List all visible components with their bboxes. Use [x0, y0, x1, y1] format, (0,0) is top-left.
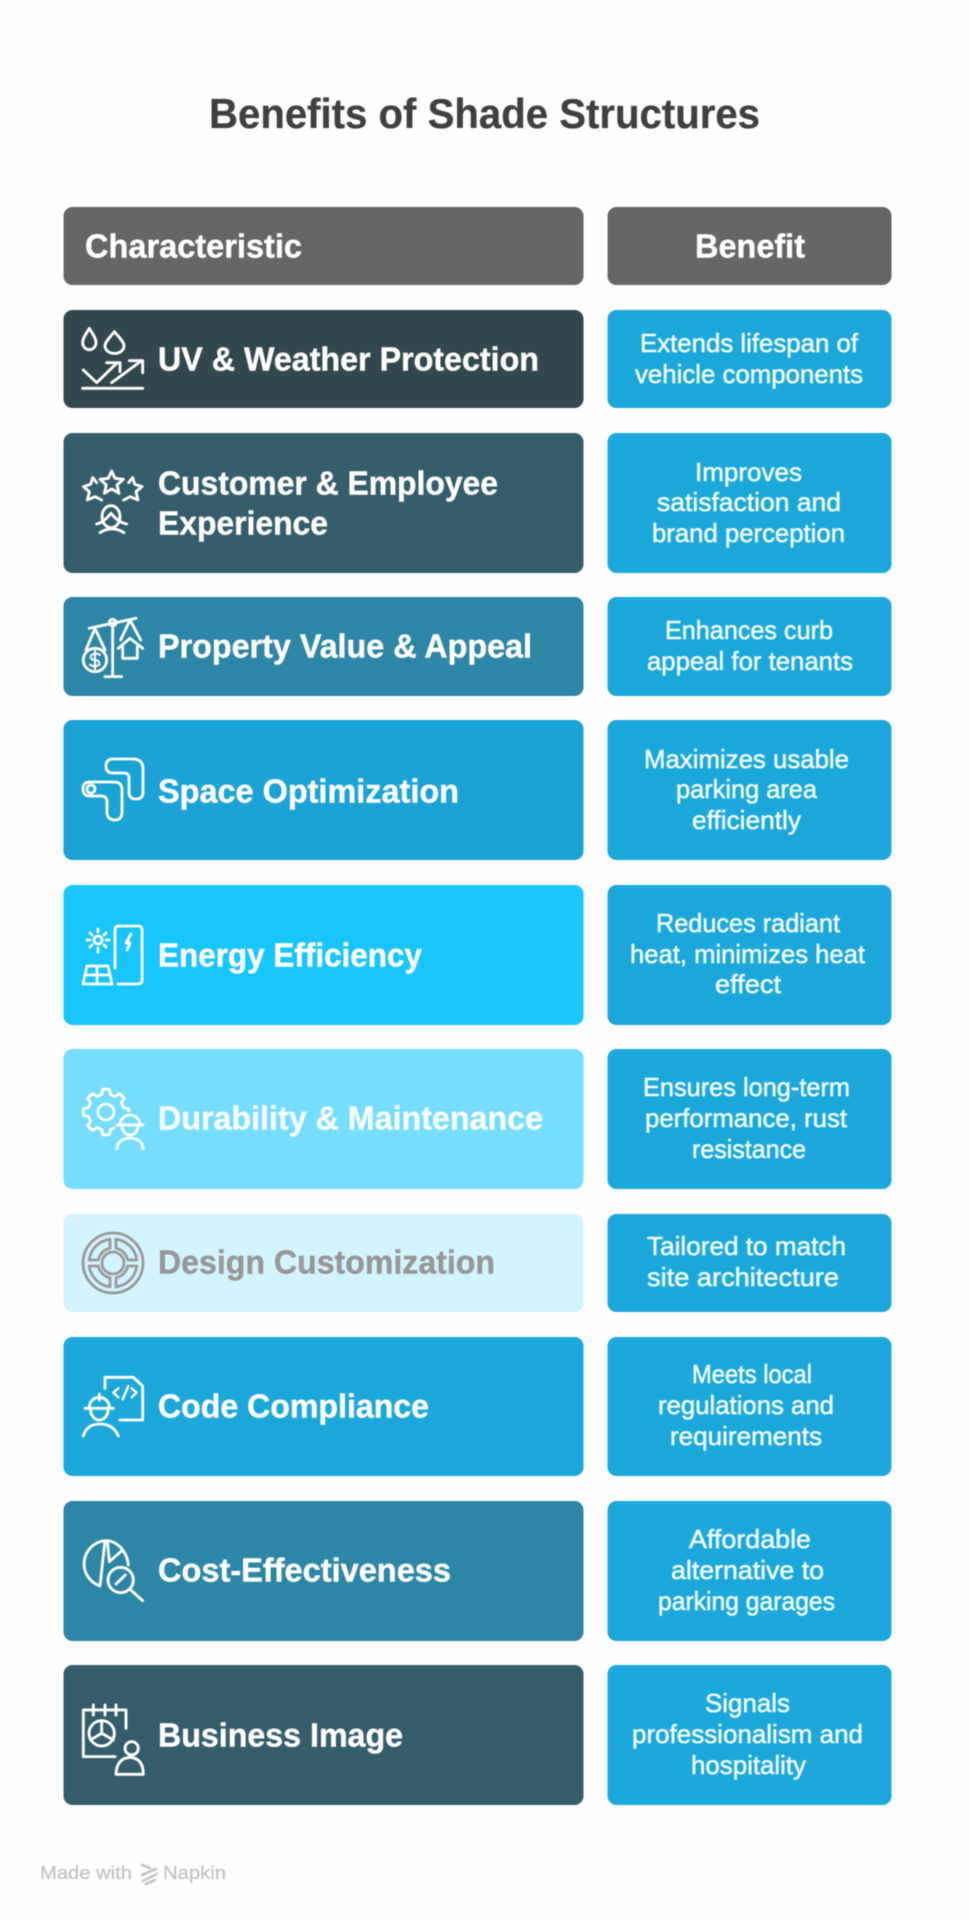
row 6 benefit	[608, 1049, 892, 1189]
row 1 benefit: Extends lifespan of	[640, 328, 859, 358]
label: Cost-Effectiveness	[158, 1552, 451, 1588]
row 8 benefit: Meets local	[692, 1359, 812, 1389]
row 4 benefit: Maximizes usable	[644, 744, 849, 774]
row 5 characteristic: energy efficiency	[64, 885, 584, 1025]
header: benefit: Benefit	[695, 228, 805, 264]
label: Durability & Maintenance	[158, 1100, 543, 1136]
row 2 benefit: brand perception	[652, 518, 845, 548]
label: Energy Efficiency	[158, 936, 423, 974]
row 8 benefit: regulations and	[658, 1390, 834, 1420]
row 10 benefit: professionalism and	[632, 1719, 863, 1749]
row 9 benefit: alternative to	[671, 1555, 824, 1585]
row 10 benefit: Signals	[705, 1688, 790, 1718]
row 2 characteristic: customer and employee experience	[64, 433, 584, 573]
label: Code Compliance	[158, 1388, 429, 1424]
row 2 benefit	[608, 433, 892, 573]
row 10 benefit	[608, 1665, 892, 1805]
header: benefit	[608, 207, 892, 285]
row 2 benefit: Improves	[695, 457, 802, 487]
row 8 benefit	[608, 1337, 892, 1476]
icon: pie chart and magnifier	[84, 1541, 143, 1601]
row 7 benefit: Tailored to match	[647, 1231, 846, 1261]
row 5 benefit: effect	[715, 969, 782, 999]
row 5 benefit	[608, 885, 892, 1025]
row 6 benefit: resistance	[692, 1134, 806, 1164]
icon: segmented circular pattern	[83, 1233, 143, 1293]
row 4 benefit: parking area	[676, 774, 818, 804]
icon: stars above person	[83, 471, 142, 533]
row 2 characteristic: customer and employee experience: Experience	[158, 504, 328, 542]
icon: engineer with code document	[83, 1377, 143, 1436]
row 4 benefit	[608, 720, 892, 860]
label: UV & Weather Protection	[158, 340, 539, 378]
row 5 benefit: Reduces radiant	[656, 908, 841, 938]
row 5 benefit: heat, minimizes heat	[630, 939, 866, 969]
title: Benefits of Shade Structures	[209, 90, 760, 137]
row 7 benefit	[608, 1214, 892, 1312]
header: characteristic	[64, 207, 584, 285]
row 6 benefit: performance, rust	[645, 1103, 848, 1133]
footer: made with Napkin: Napkin	[163, 1863, 226, 1883]
row 4 characteristic: space optimization	[64, 720, 584, 860]
row 1 characteristic: UV and weather protection	[64, 310, 584, 408]
label: Business Image	[158, 1716, 403, 1754]
row 6 characteristic: durability and maintenance	[64, 1049, 584, 1189]
label: Design Customization	[158, 1244, 495, 1280]
row 4 benefit: efficiently	[692, 805, 801, 835]
icon: bent tubes	[83, 759, 143, 820]
label: Property Value & Appeal	[158, 628, 532, 664]
row 3 benefit: appeal for tenants	[647, 646, 853, 676]
row 1 benefit: vehicle components	[635, 359, 863, 389]
label: Space Optimization	[158, 772, 459, 810]
row 9 benefit: Affordable	[689, 1524, 811, 1554]
row 6 benefit: Ensures long-term	[643, 1072, 850, 1102]
row 1 benefit	[608, 310, 892, 408]
icon: calendar, chart and person	[83, 1705, 143, 1774]
row 9 characteristic: cost-effectiveness	[64, 1501, 584, 1641]
row 3 benefit: Enhances curb	[665, 615, 833, 645]
header: characteristic: Characteristic	[85, 228, 302, 264]
row 7 characteristic: design customization	[64, 1214, 584, 1312]
icon: water drops and arrows	[83, 328, 143, 388]
row 3 characteristic: property value and appeal	[64, 597, 584, 696]
row 10 characteristic: business image	[64, 1665, 584, 1805]
icon: sun, solar panel and charger	[83, 926, 142, 984]
row 3 benefit	[608, 597, 892, 696]
footer: made with Napkin	[40, 1863, 226, 1884]
icon: scale with money and house	[83, 618, 143, 677]
footer: made with Napkin: Made with	[40, 1863, 132, 1883]
icon: gear and worker	[83, 1089, 145, 1149]
row 9 benefit	[608, 1501, 892, 1641]
row 2 benefit: satisfaction and	[657, 487, 841, 517]
row 9 benefit: parking garages	[658, 1586, 835, 1616]
row 10 benefit: hospitality	[691, 1750, 806, 1780]
row 8 characteristic: code compliance	[64, 1337, 584, 1476]
label: Customer & Employee	[158, 464, 498, 502]
row 8 benefit: requirements	[670, 1421, 822, 1451]
row 7 benefit: site architecture	[647, 1262, 839, 1292]
